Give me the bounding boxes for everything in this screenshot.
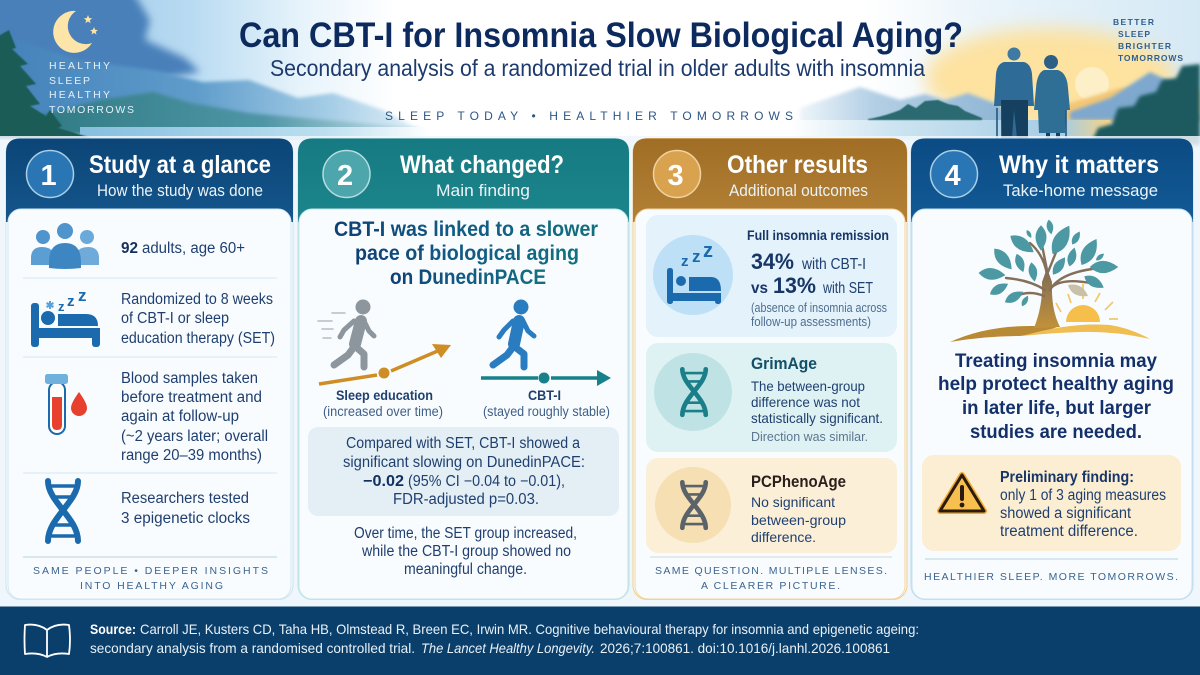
icon: moon and stars	[53, 11, 98, 53]
storm clouds	[0, 0, 200, 90]
text: clocks: Researchers tested	[121, 490, 249, 507]
badge 2: 2	[337, 160, 353, 192]
text: randomization	[121, 291, 275, 347]
text: blood samples	[121, 370, 268, 464]
icon: bed with zzz	[31, 286, 100, 347]
badge 1: 1	[40, 160, 57, 192]
tagline right: BRIGHTER	[1118, 41, 1171, 51]
badge 4: 4	[944, 160, 961, 192]
couple silhouette	[994, 48, 1070, 140]
statistic callout: Compared with SET, CBT-I showed a	[346, 435, 580, 452]
panel 3 footer text	[655, 565, 887, 592]
label: sleep education: (increased over time)	[323, 404, 443, 419]
key finding: on DunedinPACE	[390, 266, 546, 289]
right forest	[1090, 64, 1200, 145]
heading 4: Take-home message	[1003, 182, 1158, 200]
heading 1: Study at a glance	[89, 151, 271, 179]
tagline left: HEALTHY	[49, 89, 110, 101]
arrow: cbt-i stable	[481, 370, 611, 386]
icon: blood tube	[45, 374, 87, 434]
heading 3	[727, 151, 868, 200]
text: participants: 92	[121, 240, 138, 257]
tagline right: BETTER	[1113, 17, 1154, 27]
tagline left: HEALTHY	[49, 60, 110, 72]
card: remission: 13%	[773, 273, 816, 298]
statistic callout: FDR-adjusted p=0.03.	[393, 491, 539, 508]
heading 3: Other results	[727, 151, 868, 179]
source citation: 2026;7:100861. doi:10.1016/j.lanhl.2026.100861	[600, 640, 890, 656]
sunset glow	[925, 28, 1175, 128]
card: remission: vs	[751, 280, 768, 297]
take-home message: studies are needed.	[970, 422, 1142, 443]
text: clocks: 3 epigenetic clocks	[121, 510, 250, 527]
icon: grey walker	[318, 300, 374, 367]
title: Can CBT-I for Insomnia Slow Biological Aging?	[239, 16, 963, 55]
card: remission: (absence of insomnia across	[751, 301, 887, 315]
callout: preliminary finding: showed a significant	[1000, 505, 1132, 522]
island trees	[868, 100, 982, 120]
left mountains	[0, 38, 420, 130]
panel: other results	[633, 138, 907, 600]
text: blood samples: before treatment and	[121, 389, 262, 406]
icon: warning triangle	[940, 475, 984, 511]
takeaway text: while the CBT-I group showed no	[361, 543, 571, 560]
text: randomization: education therapy (SET)	[121, 330, 275, 347]
icon: blue walker	[493, 300, 534, 367]
key finding	[334, 218, 598, 289]
text: randomization: Randomized to 8 weeks	[121, 291, 273, 308]
sun	[1047, 284, 1118, 322]
text: blood samples: range 20–39 months)	[121, 447, 262, 464]
tagline right: SLEEP	[1118, 29, 1150, 39]
label: sleep education: Sleep education	[336, 387, 433, 403]
arrow: sleep education rising	[319, 344, 451, 384]
statistic callout	[308, 427, 619, 516]
take-home message: help protect healthy aging	[938, 374, 1174, 395]
source citation: Carroll JE, Kusters CD, Taha HB, Olmstead R, Breen EC, Irwin MR. Cognitive behavioural therapy for insomnia and epigenetic ageing:	[140, 621, 919, 637]
banner	[0, 0, 1200, 145]
source citation	[90, 621, 919, 656]
card: remission: Full insomnia remission	[747, 227, 889, 243]
page background strip	[0, 136, 1200, 607]
badge 1	[26, 150, 74, 198]
right far mountain	[1070, 72, 1200, 120]
icon: bed with zzz: z	[78, 286, 86, 305]
key finding: pace of biological aging	[355, 242, 579, 265]
icon: bed with zzz: z	[58, 299, 65, 314]
text: blood samples: (~2 years later; overall	[121, 428, 268, 445]
right golden hills	[1060, 88, 1200, 122]
card: grimage	[646, 343, 897, 452]
text: randomization: of CBT-I or sleep	[121, 310, 229, 327]
heading 2: What changed?	[400, 151, 564, 179]
icon: bed: z	[703, 240, 713, 262]
setting sun	[1075, 67, 1109, 101]
text: clocks	[121, 490, 250, 527]
card: pcphenoage: difference.	[751, 529, 816, 545]
tagline left: SLEEP	[49, 75, 90, 87]
label: cbt-i	[483, 387, 610, 419]
card: pcphenoage	[646, 458, 897, 553]
card: remission: 34%	[751, 249, 794, 274]
source citation: secondary analysis from a randomised controlled trial.	[90, 640, 415, 656]
callout: preliminary finding: treatment difference.	[1000, 523, 1138, 540]
take-home message: in later life, but larger	[962, 398, 1152, 419]
right lake	[790, 120, 1110, 140]
source citation: The Lancet Healthy Longevity.	[421, 640, 595, 656]
panel: study at a glance	[6, 138, 293, 600]
tagline left	[49, 60, 134, 116]
card: grimage: Direction was similar.	[751, 429, 868, 444]
key finding: CBT-I was linked to a slower	[334, 218, 598, 241]
leaves	[978, 219, 1118, 307]
takeaway text: Over time, the SET group increased,	[354, 525, 577, 542]
badge 3	[654, 150, 700, 198]
card: pcphenoage: between-group	[751, 512, 846, 528]
icon: grey dna	[682, 482, 706, 528]
icon: people	[31, 223, 99, 269]
trunk and branches	[1034, 268, 1060, 328]
label: cbt-i: (stayed roughly stable)	[483, 404, 610, 419]
badge 3: 3	[668, 160, 684, 192]
subtitle: Secondary analysis of a randomized trial in older adults with insomnia	[270, 55, 925, 81]
source citation: Source:	[90, 621, 136, 637]
card: grimage: statistically significant.	[751, 410, 883, 426]
icon: bed: z	[681, 253, 688, 270]
heading 4: Why it matters	[999, 151, 1159, 179]
icon: dna	[48, 481, 78, 541]
callout: preliminary finding	[922, 455, 1181, 551]
card: remission	[646, 215, 897, 337]
heading 1: How the study was done	[97, 182, 263, 200]
panel: why it matters	[911, 138, 1193, 600]
ground	[950, 326, 1060, 342]
card: pcphenoage: No significant	[751, 494, 835, 510]
take-home message: Treating insomnia may	[955, 351, 1157, 372]
right distant mountains	[800, 87, 1010, 125]
takeaway text	[354, 525, 577, 578]
tagline right: TOMORROWS	[1118, 53, 1183, 63]
tagline left: TOMORROWS	[49, 104, 134, 116]
takeaway text: meaningful change.	[404, 561, 527, 578]
left green hills	[30, 92, 420, 134]
callout: preliminary finding: only 1 of 3 aging measures	[1000, 487, 1166, 504]
panel 3 footer text: SAME QUESTION. MULTIPLE LENSES.	[655, 565, 887, 577]
left lake	[80, 127, 430, 140]
card: remission: with SET	[822, 280, 873, 297]
icon: open book	[24, 625, 70, 657]
card: grimage: The between-group	[751, 378, 865, 394]
card: remission: follow-up assessments)	[751, 315, 871, 329]
icon: bed: z	[692, 247, 700, 266]
text: participants: adults, age 60+	[142, 240, 245, 257]
card: remission: with CBT-I	[801, 256, 866, 273]
statistic callout: −0.02	[363, 473, 404, 490]
footer	[0, 606, 1200, 675]
panel 1 footer text	[33, 565, 268, 592]
panel 4 footer text: HEALTHIER SLEEP. MORE TOMORROWS.	[924, 571, 1178, 583]
icon: bed	[667, 240, 721, 304]
heading 4	[999, 151, 1159, 200]
tagline right	[1113, 17, 1183, 63]
badge 2	[323, 150, 370, 198]
left pine trees	[0, 30, 92, 138]
icon: tree and sunrise	[950, 219, 1150, 342]
text: blood samples: Blood samples taken	[121, 370, 258, 387]
statistic callout: significant slowing on DunedinPACE:	[343, 454, 585, 471]
heading 2	[400, 151, 564, 200]
text: blood samples: again at follow-up	[121, 408, 239, 425]
label: cbt-i: CBT-I	[528, 387, 561, 403]
heading 2: Main finding	[436, 182, 530, 200]
icon: bed with zzz: z	[67, 293, 74, 310]
strapline: SLEEP TODAY • HEALTHIER TOMORROWS	[385, 109, 793, 123]
panel 3 footer text: A CLEARER PICTURE.	[701, 580, 840, 592]
icon: teal dna	[682, 369, 706, 415]
heading 3: Additional outcomes	[729, 182, 868, 200]
panel: what changed	[298, 138, 629, 600]
badge 4	[930, 150, 978, 198]
card: grimage: difference was not	[751, 394, 860, 410]
label: sleep education	[323, 387, 443, 419]
panel 1 footer text: INTO HEALTHY AGING	[80, 580, 223, 592]
heading 1	[89, 151, 271, 200]
statistic callout: (95% CI −0.04 to −0.01),	[408, 473, 565, 490]
callout: preliminary finding: Preliminary finding:	[1000, 469, 1134, 486]
card: pcphenoage: PCPhenoAge	[751, 472, 846, 491]
take-home message	[938, 351, 1174, 443]
card: grimage: GrimAge	[751, 354, 817, 373]
panel 1 footer text: SAME PEOPLE • DEEPER INSIGHTS	[33, 565, 268, 577]
